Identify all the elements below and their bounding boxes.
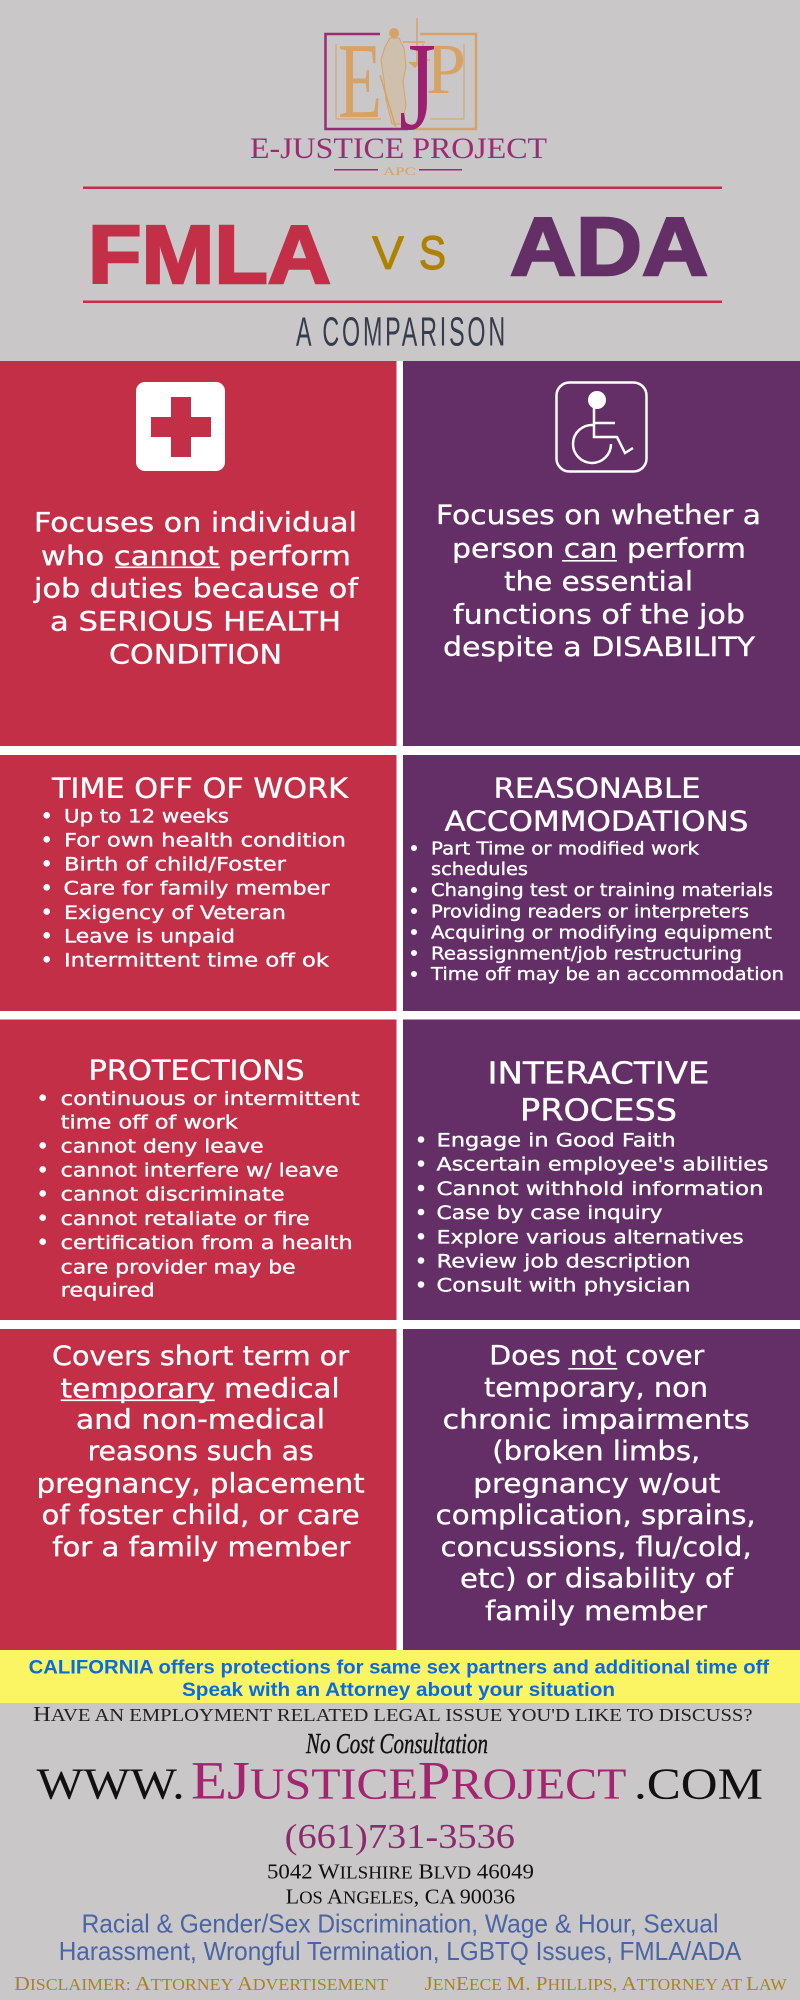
list: interactive process: Engage in Good Faith xyxy=(437,1130,676,1152)
list: protections xyxy=(39,1088,360,1302)
text: ADA coverage: pregnancy w/out xyxy=(473,1468,720,1499)
list: reasonable accommodations xyxy=(411,838,784,985)
callout: California notice xyxy=(0,1650,800,1703)
panel: FMLA coverage xyxy=(0,1329,396,1651)
logo letter J: J xyxy=(399,18,436,157)
list: reasonable accommodations: Providing readers or interpreters xyxy=(431,901,749,922)
text: ADA coverage xyxy=(436,1340,756,1627)
panel: time off of work xyxy=(0,755,396,1011)
list: time off of work xyxy=(43,806,346,972)
list: interactive process xyxy=(418,1130,768,1297)
website url: WWW. xyxy=(37,1759,185,1808)
text: ADA coverage: chronic impairments xyxy=(443,1404,750,1435)
address: 5042 W ILSHIRE BLVD 46049 xyxy=(267,1860,534,1884)
heading: protections: PROTECTIONS xyxy=(88,1054,304,1086)
panel: interactive process xyxy=(403,1020,800,1320)
list: time off of work: Exigency of Veteran xyxy=(64,902,286,924)
list: protections: cannot retaliate or fire xyxy=(61,1208,310,1230)
footer panel xyxy=(0,1702,800,2000)
text: FMLA coverage xyxy=(37,1341,365,1563)
text: ADA coverage: Does not cover xyxy=(489,1340,705,1371)
text: FMLA coverage: pregnancy, placement xyxy=(37,1468,365,1499)
text: FMLA coverage: reasons such as xyxy=(88,1436,314,1467)
panel: FMLA focus xyxy=(0,361,396,746)
icon: lady justice statue xyxy=(380,18,430,128)
title: vs xyxy=(372,226,446,279)
list: interactive process: Explore various alternatives xyxy=(437,1226,744,1248)
list: time off of work: Leave is unpaid xyxy=(64,926,235,948)
website url: EJUSTICE PROJECT xyxy=(191,1750,627,1810)
attorney name: JENEECE M. PHILLIPS, ATTORNEY AT LAW xyxy=(424,1973,787,1995)
logo subtitle: APC xyxy=(383,166,416,178)
text: ADA coverage: etc) or disability of xyxy=(460,1564,735,1595)
text: FMLA coverage: Covers short term or xyxy=(52,1341,350,1372)
list: reasonable accommodations: Part Time or modified work xyxy=(431,838,700,859)
text: ADA focus: the essential xyxy=(504,567,693,598)
address: LOS ANGELES, CA 90036 xyxy=(286,1884,515,1908)
text: FMLA focus xyxy=(33,508,360,670)
heading: reasonable accommodations: REASONABLE xyxy=(494,773,700,805)
logo letters: E xyxy=(338,22,382,141)
address xyxy=(267,1860,534,1908)
title: vs: V xyxy=(372,226,405,279)
text: prompt: HAVE AN EMPLOYMENT RELATED LEGAL ISSUE YOU'D LIKE TO DISCUSS? xyxy=(33,1702,753,1726)
callout: California notice: Speak with an Attorney about your situation xyxy=(182,1679,615,1701)
text: no cost consultation: No Cost Consultation xyxy=(305,1728,488,1760)
list: time off of work: Up to 12 weeks xyxy=(64,806,229,828)
panel: ADA coverage xyxy=(403,1329,800,1651)
logo subtitle xyxy=(334,166,462,178)
list: reasonable accommodations: Reassignment/job restructuring xyxy=(431,943,742,964)
text: FMLA focus: who cannot perform xyxy=(41,541,351,572)
text: ADA coverage: concussions, flu/cold, xyxy=(441,1532,752,1563)
website url: .COM xyxy=(634,1759,763,1808)
text: ADA focus xyxy=(436,500,761,663)
text: FMLA focus: CONDITION xyxy=(109,639,282,670)
list: interactive process: Consult with physician xyxy=(436,1275,690,1297)
practice areas xyxy=(59,1908,742,1966)
text: FMLA coverage: and non-medical xyxy=(76,1404,325,1435)
text: ADA coverage: (broken limbs, xyxy=(492,1436,700,1467)
text: ADA focus: despite a DISABILITY xyxy=(443,632,756,663)
text: FMLA coverage: for a family member xyxy=(52,1532,351,1563)
logo wordmark: E-JUSTICE PROJECT xyxy=(250,132,547,165)
text: FMLA coverage: temporary medical xyxy=(61,1373,340,1404)
list: time off of work: Care for family member xyxy=(64,878,330,900)
header panel xyxy=(0,0,800,361)
logo letters xyxy=(338,22,466,141)
title: ADA: ADA xyxy=(510,200,708,293)
title: FMLA: FMLA xyxy=(88,208,331,301)
practice areas: Harassment, Wrongful Termination, LGBTQ Issues, FMLA/ADA xyxy=(59,1936,742,1966)
list: protections: cannot interfere w/ leave xyxy=(61,1160,339,1182)
list: reasonable accommodations: Changing test or training materials xyxy=(431,880,773,901)
logo xyxy=(250,18,547,178)
panel: ADA focus xyxy=(403,361,800,746)
text: FMLA focus: Focuses on individual xyxy=(34,508,357,539)
icon: medical cross xyxy=(136,382,225,471)
list: protections: care provider may be xyxy=(61,1256,296,1278)
text: FMLA coverage: of foster child, or care xyxy=(42,1500,360,1531)
list: protections: continuous or intermittent xyxy=(61,1088,360,1110)
list: reasonable accommodations: schedules xyxy=(431,859,528,880)
list: protections: required xyxy=(61,1280,155,1302)
subtitle: A COMPARISON xyxy=(296,308,508,354)
panel: reasonable accommodations xyxy=(403,755,800,1011)
text: FMLA focus: a SERIOUS HEALTH xyxy=(50,607,341,638)
heading: interactive process: PROCESS xyxy=(520,1093,677,1128)
list: interactive process: Cannot withhold information xyxy=(436,1178,764,1200)
list: time off of work: Birth of child/Foster xyxy=(64,854,286,876)
icon: wheelchair xyxy=(556,382,646,472)
heading: interactive process: INTERACTIVE xyxy=(488,1057,710,1092)
title: vs: S xyxy=(419,226,446,279)
list: protections: certification from a health xyxy=(61,1232,353,1254)
heading: reasonable accommodations: ACCOMMODATIONS xyxy=(444,806,748,838)
text: ADA focus: person can perform xyxy=(452,533,746,564)
list: time off of work: For own health condition xyxy=(64,830,346,852)
list: interactive process: Review job description xyxy=(437,1251,691,1273)
panel: protections xyxy=(0,1020,396,1320)
practice areas: Racial & Gender/Sex Discrimination, Wage & Hour, Sexual xyxy=(82,1908,718,1938)
list: protections: cannot deny leave xyxy=(61,1136,264,1158)
disclaimer: DISCLAIMER: ATTORNEY ADVERTISEMENT xyxy=(14,1973,388,1995)
heading: interactive process xyxy=(488,1057,710,1128)
list: interactive process: Ascertain employee's abilities xyxy=(436,1154,768,1176)
list: reasonable accommodations: Time off may be an accommodation xyxy=(430,964,784,985)
website url xyxy=(37,1750,763,1810)
text: ADA coverage: temporary, non xyxy=(484,1373,708,1404)
text: ADA coverage: family member xyxy=(485,1596,708,1627)
list: reasonable accommodations: Acquiring or modifying equipment xyxy=(431,922,772,943)
list: time off of work: Intermittent time off ok xyxy=(64,950,329,972)
heading: time off of work: TIME OFF OF WORK xyxy=(51,773,349,805)
logo frame xyxy=(326,34,476,129)
list: protections: cannot discriminate xyxy=(61,1184,285,1206)
text: ADA focus: functions of the job xyxy=(453,599,745,630)
list: interactive process: Case by case inquiry xyxy=(436,1202,662,1224)
heading: reasonable accommodations xyxy=(444,773,748,838)
callout: California notice: CALIFORNIA offers protections for same sex partners and additional time off xyxy=(29,1656,770,1678)
logo letters: P xyxy=(426,29,466,109)
text: ADA coverage: complication, sprains, xyxy=(436,1500,756,1531)
list: protections: time off of work xyxy=(61,1112,238,1134)
text: FMLA focus: job duties because of xyxy=(33,573,360,604)
text: ADA focus: Focuses on whether a xyxy=(436,500,761,531)
phone number: (661)731-3536 xyxy=(285,1817,515,1856)
